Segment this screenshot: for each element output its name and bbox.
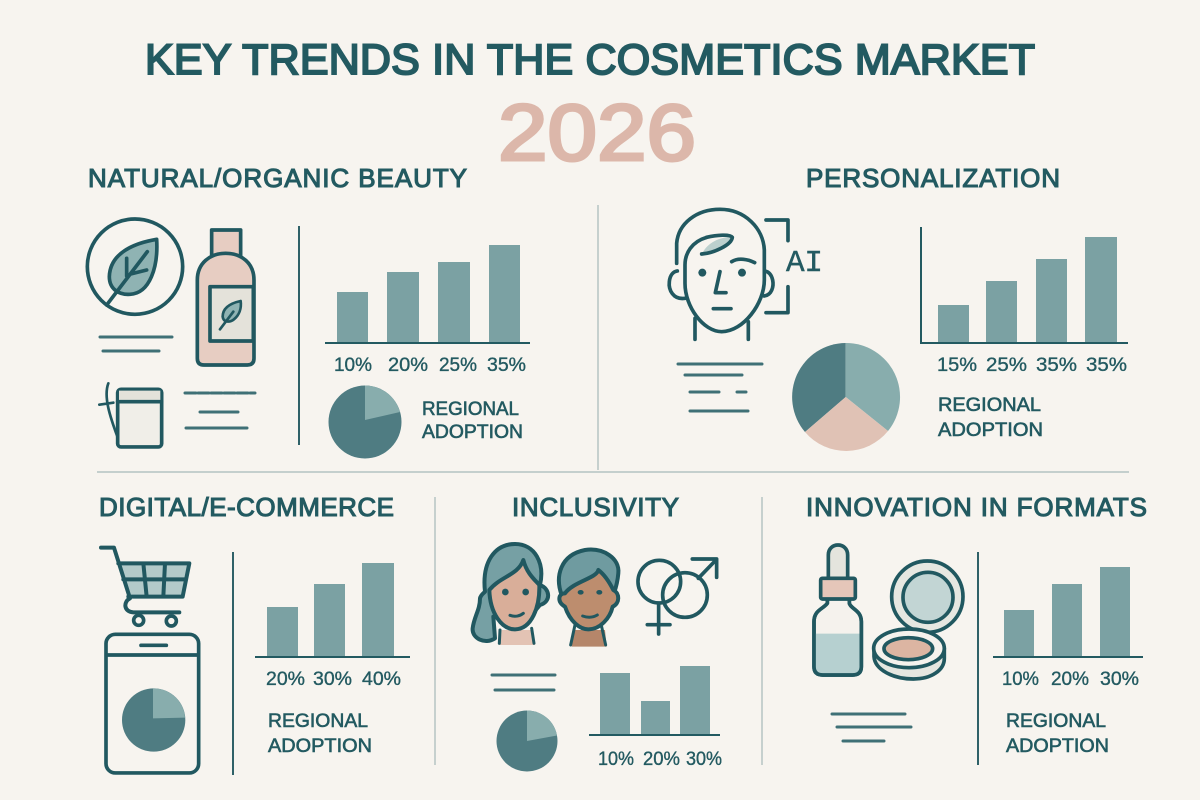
year: 2026	[498, 88, 696, 177]
label: regional adoption: REGIONAL	[1006, 711, 1106, 732]
icon: compact	[874, 561, 963, 679]
icon: gender symbols	[638, 559, 717, 634]
bar chart: natural/organic: 10%	[334, 355, 372, 376]
icon: dropper bottle	[814, 545, 861, 675]
heading: digital/e-commerce: DIGITAL/E-COMMERCE	[99, 492, 394, 522]
bar chart: inclusivity: 30%	[686, 749, 722, 770]
heading: inclusivity: INCLUSIVITY	[512, 492, 679, 522]
label: regional adoption: ADOPTION	[938, 420, 1043, 441]
label: regional adoption	[938, 395, 1043, 441]
bar chart: digital	[255, 563, 410, 690]
bar chart: personalization	[921, 227, 1128, 376]
label: regional adoption: ADOPTION	[422, 422, 523, 443]
text placeholder lines	[100, 337, 255, 428]
bar chart: personalization: 35%	[1086, 355, 1127, 376]
text placeholder lines	[832, 714, 911, 741]
panel: personalization	[669, 163, 1128, 451]
bar chart: natural/organic	[325, 245, 530, 376]
bar chart: personalization: 25%	[986, 355, 1027, 376]
icon: AI face scan	[669, 209, 788, 339]
bar chart: natural/organic: 20%	[388, 355, 428, 376]
label: AI: AI	[786, 246, 823, 281]
icon: bottle with leaf label	[197, 230, 254, 365]
heading: natural/organic beauty: NATURAL/ORGANIC BEAUTY	[88, 163, 467, 193]
label: regional adoption: ADOPTION	[1006, 736, 1109, 757]
text placeholder lines	[492, 675, 555, 690]
label: regional adoption: ADOPTION	[268, 736, 372, 757]
panel: inclusivity	[473, 492, 722, 772]
bar chart: digital: 30%	[313, 669, 352, 690]
label: regional adoption: REGIONAL	[422, 399, 519, 420]
icon: two faces	[473, 544, 618, 647]
bar chart: innovation: 10%	[1002, 669, 1039, 690]
label: regional adoption: REGIONAL	[938, 395, 1041, 416]
label: regional adoption: REGIONAL	[268, 711, 368, 732]
icon: phone with pie chart	[106, 634, 199, 773]
bar chart: inclusivity	[589, 666, 722, 770]
bar chart: digital: 20%	[266, 669, 305, 690]
bar chart: innovation: 30%	[1100, 669, 1139, 690]
bar chart: inclusivity: 10%	[598, 749, 634, 770]
panel: innovation in formats	[806, 492, 1147, 765]
title: KEY TRENDS IN THE COSMETICS MARKET	[145, 36, 1035, 84]
bar chart: digital: 40%	[362, 669, 401, 690]
panel: natural/organic beauty	[87, 163, 530, 458]
bar chart: natural/organic: 25%	[439, 355, 477, 376]
heading: innovation in formats: INNOVATION IN FORMATS	[806, 492, 1147, 522]
panel: digital/e-commerce	[99, 492, 410, 775]
label: regional adoption	[422, 399, 523, 443]
label: regional adoption	[268, 711, 372, 757]
label: regional adoption	[1006, 711, 1109, 757]
bar chart: innovation: 20%	[1051, 669, 1089, 690]
icon: leaf in circle	[87, 219, 183, 314]
bar chart: innovation	[993, 567, 1143, 690]
pie chart: natural/organic	[328, 386, 402, 458]
icon: jar with sprig	[99, 383, 162, 447]
bar chart: natural/organic: 35%	[487, 355, 526, 376]
bar chart: personalization: 35%	[1036, 355, 1077, 376]
bar chart: inclusivity: 20%	[643, 749, 680, 770]
icon: shopping cart	[101, 548, 189, 626]
pie chart: inclusivity	[496, 710, 558, 772]
text placeholder lines	[678, 364, 762, 411]
pie chart: personalization	[792, 343, 900, 451]
heading: personalization: PERSONALIZATION	[806, 163, 1060, 193]
bar chart: personalization: 15%	[937, 355, 977, 376]
